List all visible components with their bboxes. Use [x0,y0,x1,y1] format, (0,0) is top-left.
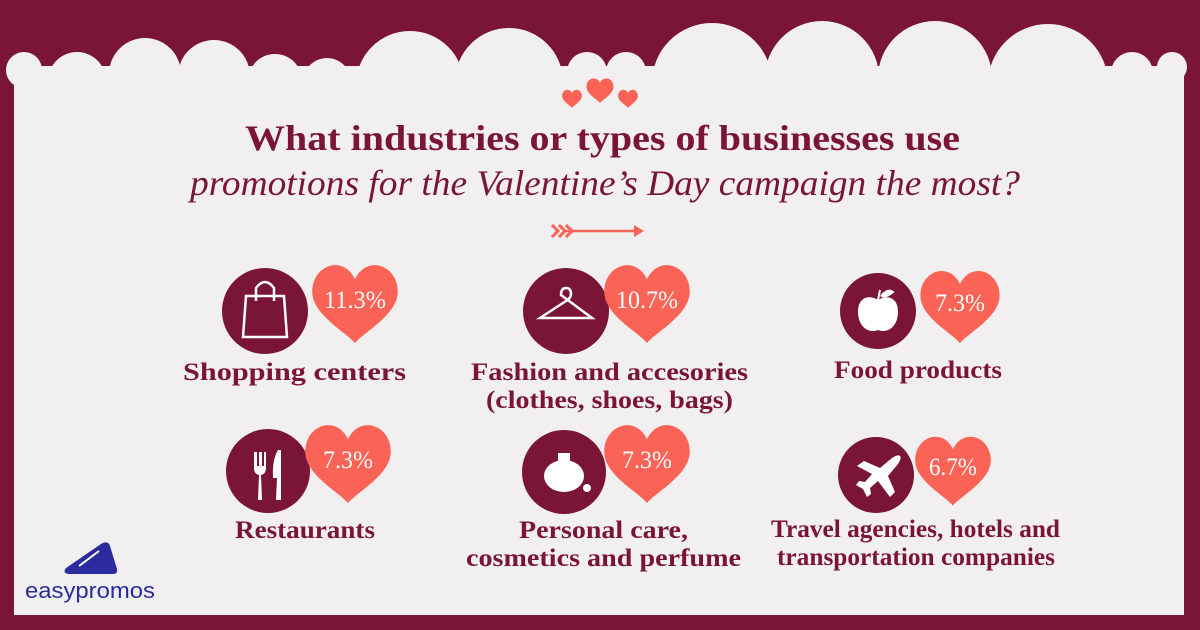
item: travel [771,437,1060,571]
logo: easypromos [25,542,155,603]
item: food products [834,271,1002,384]
item: shopping centers: Shopping centers [183,359,406,386]
logo: easypromos: easypromos [25,578,155,603]
item: personal care: 7.3% [622,447,672,474]
item: fashion: Fashion and accesories [471,359,748,386]
item: personal care: cosmetics and perfume [466,545,741,572]
arrow [552,225,644,237]
item: travel: Travel agencies, hotels and [771,516,1060,543]
item: fashion: (clothes, shoes, bags) [486,387,733,414]
item: shopping centers [183,265,406,386]
item: restaurants: Restaurants [235,517,375,544]
item: personal care [466,425,741,572]
title [187,118,1020,203]
item: travel: transportation companies [777,544,1055,571]
title: promotions for the Valentine’s Day campaign the most? [187,163,1020,203]
item: restaurants [226,425,391,544]
item: restaurants: 7.3% [323,447,373,474]
title: What industries or types of businesses use [245,118,960,158]
item: food products: 7.3% [935,290,985,317]
item: shopping centers: 11.3% [324,287,386,314]
item: personal care: Personal care, [519,517,688,544]
item: travel: 6.7% [929,454,977,481]
icon: three small hearts [562,78,638,108]
item: fashion: 10.7% [616,287,678,314]
item: fashion [471,265,748,414]
item: food products: Food products [834,357,1002,384]
